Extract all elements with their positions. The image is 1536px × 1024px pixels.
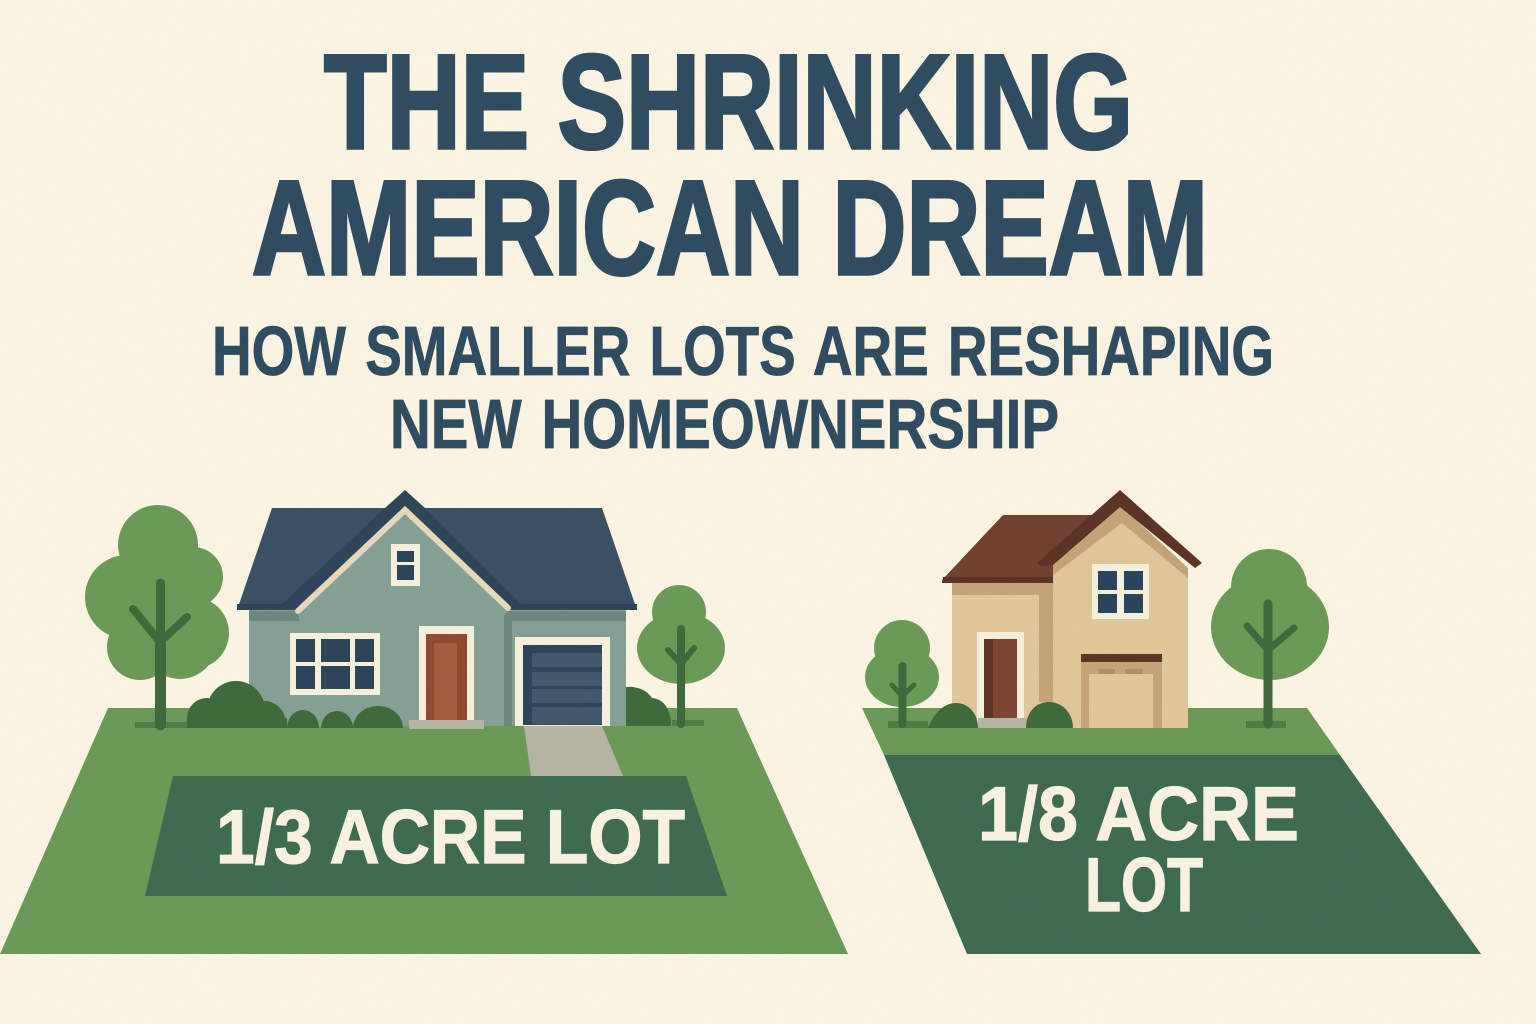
- upper window: [1092, 564, 1149, 619]
- title: AMERICAN DREAM: [252, 154, 1208, 303]
- small lot label: [978, 772, 1299, 928]
- large lawn: [0, 708, 848, 954]
- garage: [515, 637, 610, 726]
- large lot label plate: [145, 776, 727, 896]
- gable roof: [280, 490, 523, 606]
- title: [252, 28, 1208, 303]
- main roof: [237, 508, 637, 610]
- small lawn: [862, 708, 1340, 755]
- small lot label plate: [884, 755, 1481, 954]
- small lot label: 1/8 ACRE: [978, 772, 1299, 857]
- subtitle: HOW SMALLER LOTS ARE RESHAPING: [212, 312, 1274, 390]
- subtitle: NEW HOMEOWNERSHIP: [390, 385, 1059, 463]
- driveway: [524, 726, 623, 776]
- step: [978, 718, 1027, 728]
- large house: [237, 490, 637, 729]
- main wall: [1053, 505, 1188, 728]
- front window: [290, 633, 380, 695]
- subtitle: [212, 312, 1274, 463]
- left wing roof: [942, 515, 1092, 583]
- small house: [942, 490, 1202, 728]
- door: [977, 632, 1024, 728]
- door step: [409, 720, 484, 729]
- gable wall: [298, 512, 508, 616]
- front door: [419, 626, 474, 722]
- title: THE SHRINKING: [324, 28, 1133, 177]
- gable trim: [298, 510, 508, 611]
- panel: large lot: [0, 490, 848, 954]
- small right tree: [1211, 549, 1329, 728]
- house walls: [249, 606, 626, 726]
- small left tree: [865, 620, 939, 728]
- left tree: [85, 505, 229, 728]
- panel: small lot: [862, 490, 1481, 954]
- large lot bushes: [187, 681, 671, 728]
- small lot bushes: [928, 702, 1073, 728]
- large lot label: 1/3 ACRE LOT: [216, 795, 685, 880]
- left wing wall: [952, 583, 1053, 728]
- right tree: [637, 585, 725, 726]
- garage: [1081, 654, 1162, 728]
- gable window: [391, 544, 420, 586]
- gable roof: [1037, 490, 1202, 568]
- small lot label: LOT: [1085, 843, 1203, 928]
